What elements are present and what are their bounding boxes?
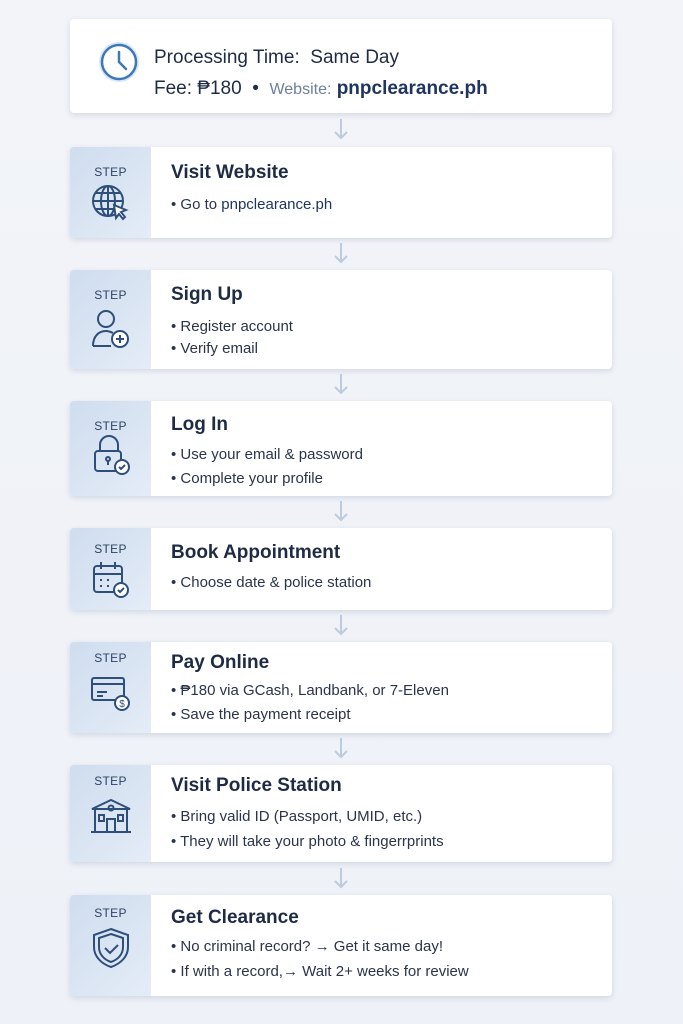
step 3: • Complete your profile xyxy=(171,470,323,487)
icon: card payment: $ xyxy=(119,699,125,710)
step 1: • Go to pnpclearance.ph xyxy=(171,196,332,213)
step 7: • No criminal record? → Get it same day! xyxy=(171,938,443,955)
icon: police station xyxy=(91,798,131,833)
icon: card payment xyxy=(91,677,130,711)
arrow xyxy=(334,501,348,522)
step 7 xyxy=(70,895,612,996)
header card xyxy=(70,19,612,113)
icon: user add xyxy=(92,310,129,348)
step 3: STEP xyxy=(94,419,127,433)
icon: globe xyxy=(92,185,128,220)
step 5 xyxy=(70,642,612,733)
step 5: • ₱180 via GCash, Landbank, or 7-Eleven xyxy=(171,682,449,699)
step 3: • Use your email & password xyxy=(171,446,363,463)
arrow xyxy=(334,243,348,264)
icon: shield xyxy=(93,928,129,968)
step 1: Visit Website xyxy=(171,162,289,183)
step 6: STEP xyxy=(94,774,127,788)
step 2: • Register account xyxy=(171,318,293,335)
step 6 xyxy=(70,765,612,862)
step 7: • If with a record,→ Wait 2+ weeks for review xyxy=(171,963,469,980)
icon: lock xyxy=(94,435,130,475)
step 3: Log In xyxy=(171,414,228,435)
arrow xyxy=(334,374,348,394)
step 2 xyxy=(70,270,612,369)
arrow xyxy=(334,119,348,140)
step 5: STEP xyxy=(94,651,127,665)
step 4 xyxy=(70,528,612,610)
icon: calendar xyxy=(93,562,129,598)
arrow xyxy=(334,615,348,636)
step 2: • Verify email xyxy=(171,340,258,357)
step 6: Visit Police Station xyxy=(171,775,342,796)
step 2: Sign Up xyxy=(171,284,243,305)
step 7: Get Clearance xyxy=(171,907,299,928)
step 4: • Choose date & police station xyxy=(171,574,371,591)
step 1 xyxy=(70,147,612,238)
step 1: STEP xyxy=(94,165,127,179)
step 6: • Bring valid ID (Passport, UMID, etc.) xyxy=(171,808,422,825)
header text: Processing Time: Same Day xyxy=(154,47,399,68)
step 5: Pay Online xyxy=(171,652,269,673)
arrow xyxy=(334,738,348,758)
icon: clock xyxy=(99,42,139,82)
header text: Fee: ₱180 • Website: pnpclearance.ph xyxy=(154,78,488,99)
step 6: • They will take your photo & fingerrprints xyxy=(171,833,444,850)
header text xyxy=(154,47,488,99)
step 2: STEP xyxy=(94,288,127,302)
step 4: STEP xyxy=(94,542,127,556)
step 7: STEP xyxy=(94,906,127,920)
step 4: Book Appointment xyxy=(171,542,340,563)
step 3 xyxy=(70,401,612,496)
arrow xyxy=(334,868,348,888)
step 5: • Save the payment receipt xyxy=(171,706,351,723)
